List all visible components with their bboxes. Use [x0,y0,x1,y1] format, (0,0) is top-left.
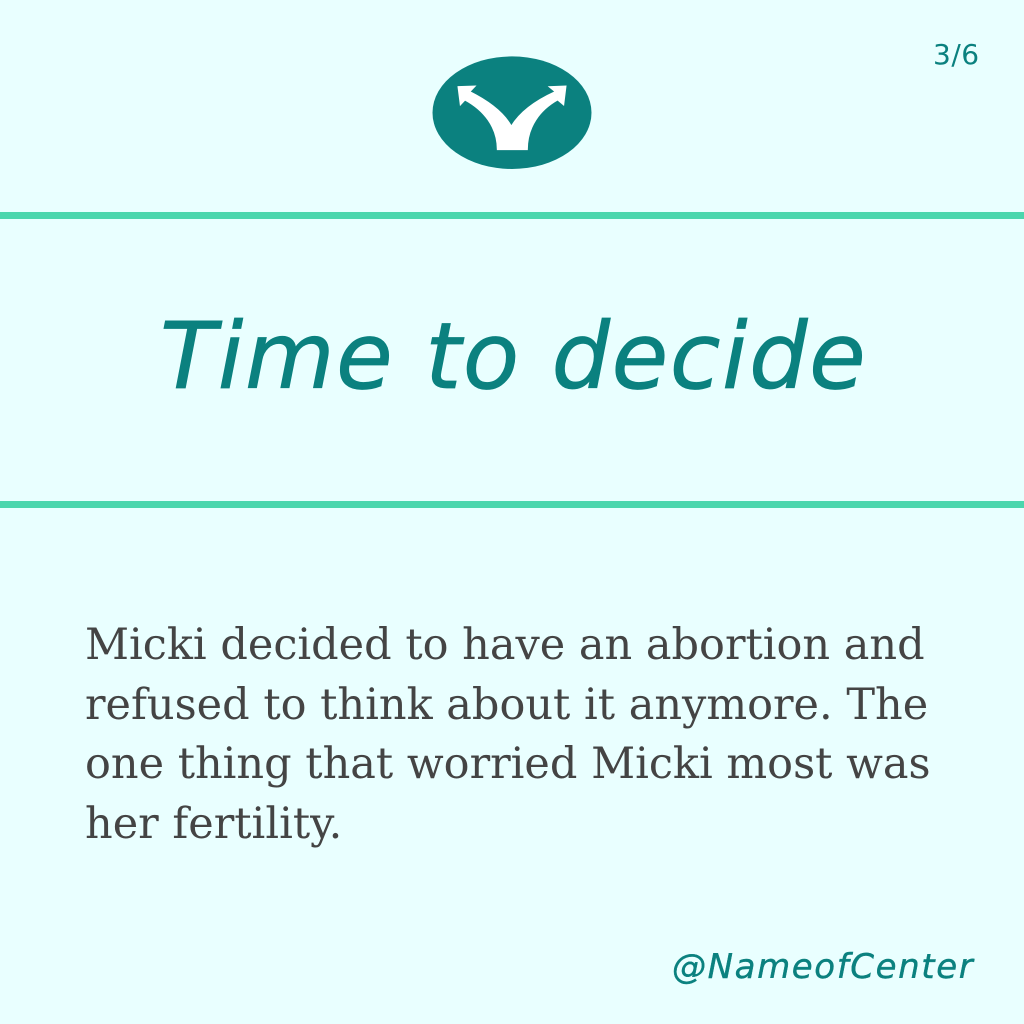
page number: 3/6 [933,38,980,71]
title: Time to decide [160,303,867,410]
body text: Micki decided to have an abortion and [85,620,925,670]
handle: @NameofCenter [672,947,974,987]
body text: her fertility. [85,798,342,848]
bottom divider [0,501,1024,508]
body text [85,620,931,848]
top divider [0,212,1024,219]
icon: diverging arrows in teal ellipse [432,56,592,169]
body text: one thing that worried Micki most was [85,739,931,789]
body text: refused to think about it anymore. The [85,680,928,730]
